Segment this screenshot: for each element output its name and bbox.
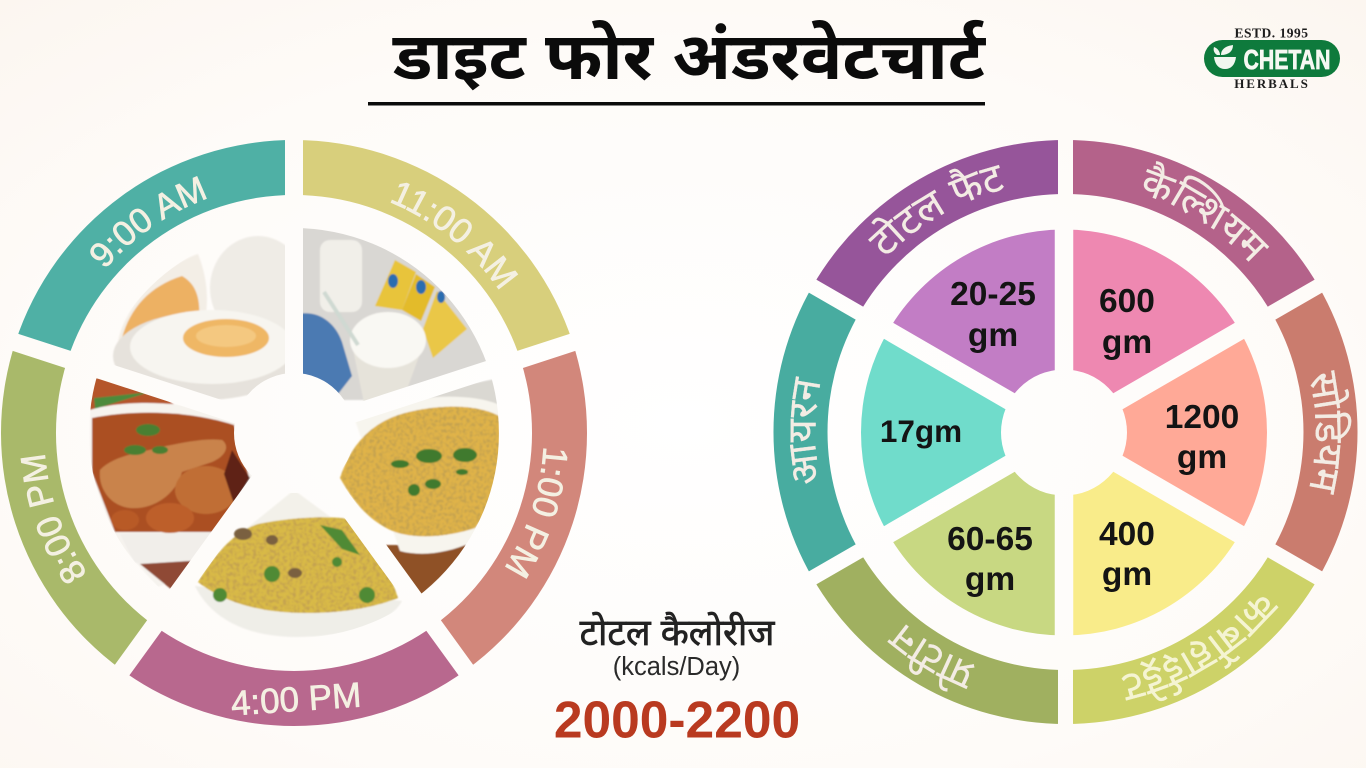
value: sodium: 1200 xyxy=(1165,399,1239,436)
logo: Chetan Herbals: HERBALS xyxy=(1234,76,1310,91)
unit: kcals per day: (kcals/Day) xyxy=(613,653,740,681)
label: total fat: टोटल फैट xyxy=(868,164,1004,254)
photo: banana shake xyxy=(303,228,486,401)
photo: boiled eggs xyxy=(112,236,285,400)
right wheel: daily nutrients xyxy=(773,140,1358,724)
value: iron: 17gm xyxy=(880,413,962,449)
nutrient inner pie xyxy=(861,230,1267,636)
value: carbohydrate: gm xyxy=(1102,556,1152,593)
meal ring segments xyxy=(1,140,587,726)
label: sodium: सोडियम xyxy=(1310,370,1352,495)
title: डाइट फोर अंडरवेटचार्ट xyxy=(392,19,987,93)
total calories block xyxy=(554,612,800,748)
value: protein: gm xyxy=(965,561,1015,598)
label: protein: प्रोटीन xyxy=(887,624,974,692)
value: 2000-2200: 2000-2200 xyxy=(554,690,800,748)
label: 4:00 PM: 4:00 PM xyxy=(230,675,362,723)
label: iron: आयरन xyxy=(790,376,820,484)
title underline xyxy=(368,102,985,106)
food photos xyxy=(90,220,510,637)
logo: Chetan Herbals xyxy=(1204,26,1340,91)
label: 9:00 AM: 9:00 AM xyxy=(90,176,207,266)
left wheel: meal timing xyxy=(1,140,587,726)
photo: chicken curry xyxy=(90,378,263,590)
value: protein: 60-65 xyxy=(947,521,1033,558)
value: carbohydrate: 400 xyxy=(1099,516,1155,553)
icon: leaf and bowl xyxy=(1214,45,1236,69)
label: 11:00 AM: 11:00 AM xyxy=(390,182,518,290)
photo: dal khichdi xyxy=(340,378,500,596)
heading: total calories: टोटल कैलोरीज xyxy=(580,612,775,653)
value: calcium: 600 xyxy=(1099,283,1155,320)
label: carbohydrate: कार्बोहाईड्रेट xyxy=(1122,597,1278,702)
logo: Chetan Herbals: CHETAN xyxy=(1244,44,1330,75)
logo: Chetan Herbals: ESTD. 1995 xyxy=(1234,26,1309,40)
photo: vegetable pulao xyxy=(195,490,402,637)
label: 1:00 PM: 1:00 PM xyxy=(505,448,568,579)
nutrient outer ring xyxy=(773,140,1358,724)
label: 8:00 PM: 8:00 PM xyxy=(20,455,85,584)
value: sodium: gm xyxy=(1177,439,1227,476)
label: calcium: कैल्शियम xyxy=(1144,161,1270,262)
value: total fat: gm xyxy=(968,317,1018,354)
value: calcium: gm xyxy=(1102,324,1152,361)
value: total fat: 20-25 xyxy=(950,276,1036,313)
